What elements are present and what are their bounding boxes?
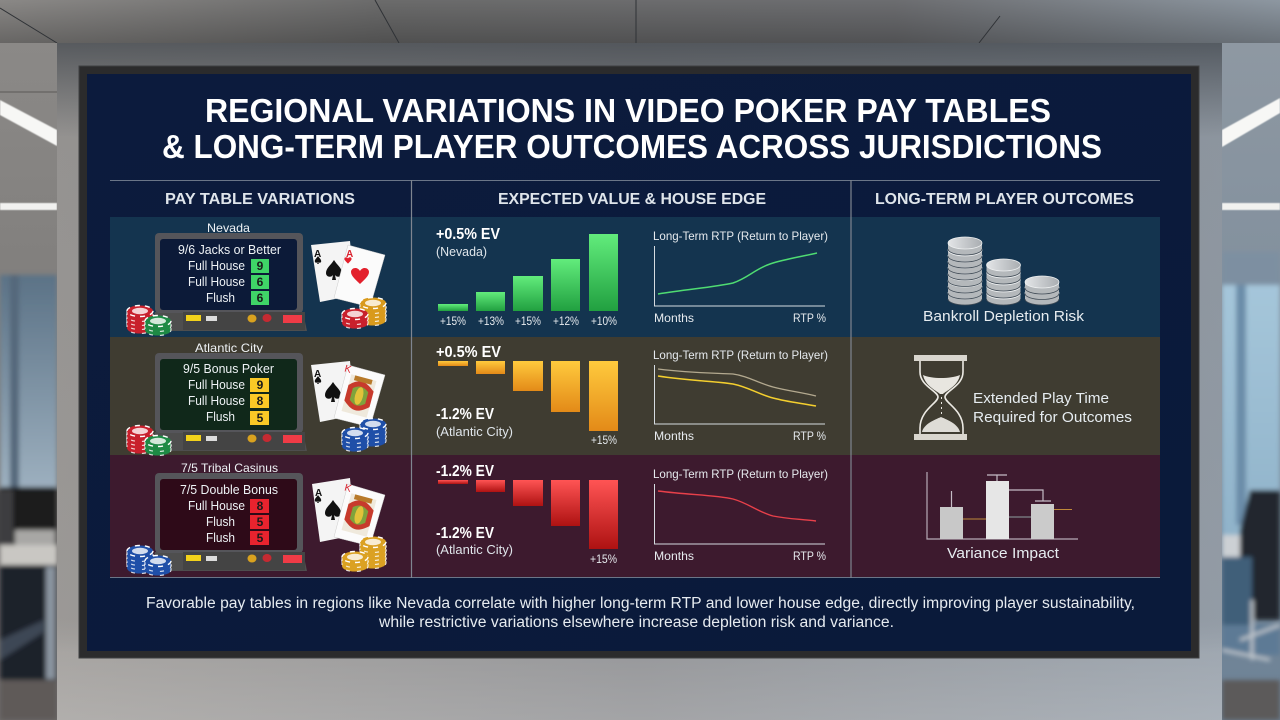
panel: bankroll depletion risk bbox=[923, 237, 1085, 325]
EV label: bottom: -1.2% EV bbox=[436, 406, 495, 423]
icon: video poker machine: Full House bbox=[188, 499, 245, 513]
column heading: expected value and house edge: EXPECTED VALUE & HOUSE EDGE bbox=[498, 191, 766, 208]
icon: video poker machine: 7/5 Double Bonus bbox=[180, 483, 278, 497]
title bbox=[162, 92, 1102, 165]
line chart: Nevada long-term RTP: Long-Term RTP (Return to Player) bbox=[653, 229, 828, 243]
line chart: Atlantic City long-term RTP: Long-Term RTP (Return to Player) bbox=[653, 348, 828, 362]
icon: video poker machine bbox=[150, 353, 307, 451]
bar chart: Nevada EV: +15% bbox=[515, 314, 541, 328]
icon: poker chips left bbox=[127, 306, 171, 336]
title: & LONG-TERM PLAYER OUTCOMES ACROSS JURISDICTIONS bbox=[162, 128, 1102, 165]
panel: Nevada expected value bbox=[436, 226, 828, 328]
title: REGIONAL VARIATIONS IN VIDEO POKER PAY TABLES bbox=[205, 92, 1051, 129]
bar chart: Tribal Casinos EV bbox=[438, 480, 618, 566]
panel: Tribal Casinos expected value bbox=[436, 463, 828, 566]
right ceiling lights bbox=[1222, 98, 1280, 210]
icon: video poker machine: 5 bbox=[257, 515, 264, 529]
line chart: Tribal Casinos long-term RTP: Long-Term RTP (Return to Player) bbox=[653, 467, 828, 481]
icon: poker chips left bbox=[127, 546, 171, 576]
icon: ace and king cards bbox=[311, 361, 385, 427]
bar chart: Nevada EV bbox=[438, 234, 618, 328]
icon: video poker machine: 8 bbox=[257, 499, 264, 513]
row band: Nevada bbox=[110, 217, 1160, 337]
bar chart: Nevada EV: +10% bbox=[591, 314, 617, 328]
icon: video poker machine: Flush bbox=[206, 515, 235, 529]
icon: ace and king cards bbox=[312, 478, 385, 546]
icon: video poker machine: Full House bbox=[188, 259, 245, 273]
line chart: Tribal Casinos long-term RTP bbox=[653, 467, 828, 563]
bar chart: Atlantic City EV: +15% bbox=[591, 433, 617, 447]
icon: ace and king cards: A bbox=[315, 488, 322, 499]
label: Bankroll Depletion Risk bbox=[923, 308, 1085, 325]
icon: video poker machine bbox=[150, 473, 307, 571]
panel: Atlantic City expected value bbox=[436, 344, 828, 447]
EV label: bottom bbox=[436, 525, 513, 557]
line chart: Tribal Casinos long-term RTP: Months bbox=[654, 549, 694, 563]
label: Atlantic City: Atlantic City bbox=[195, 341, 263, 355]
icon: video poker machine: Flush bbox=[206, 291, 235, 305]
column heading: long-term player outcomes: LONG-TERM PLAYER OUTCOMES bbox=[875, 191, 1134, 208]
label: Extended Play Time bbox=[973, 390, 1109, 407]
line chart: Nevada long-term RTP: Months bbox=[654, 311, 694, 325]
icon: ace and king cards: A bbox=[314, 369, 321, 380]
bar chart: Nevada EV: +12% bbox=[553, 314, 579, 328]
icon: poker chips right bbox=[342, 536, 386, 572]
icon: video poker machine: Flush bbox=[206, 410, 235, 424]
icon: hourglass bbox=[914, 355, 967, 440]
panel: Nevada pay table bbox=[127, 221, 386, 336]
icon: poker chips left bbox=[127, 426, 171, 456]
icon: video poker machine: 6 bbox=[257, 291, 264, 305]
icon: poker chips right bbox=[342, 418, 386, 452]
label bbox=[973, 390, 1132, 426]
left ceiling lights bbox=[0, 100, 57, 210]
icon: ace cards bbox=[311, 241, 385, 307]
EV label: bottom: (Atlantic City) bbox=[436, 424, 513, 439]
icon: video poker machine: 5 bbox=[257, 411, 264, 425]
EV label: top: +0.5% EV bbox=[436, 344, 502, 361]
left side view bbox=[0, 43, 57, 720]
line chart: Atlantic City long-term RTP bbox=[653, 348, 828, 443]
row band: Atlantic City bbox=[110, 337, 1160, 455]
EV label: bottom: (Atlantic City) bbox=[436, 542, 513, 557]
EV label: bottom: -1.2% EV bbox=[436, 525, 495, 542]
footer summary bbox=[146, 595, 1135, 631]
bar chart: Atlantic City EV bbox=[438, 361, 618, 447]
footer summary: while restrictive variations elsewhere increase depletion risk and variance. bbox=[378, 614, 894, 631]
row band: Tribal Casinos bbox=[110, 455, 1160, 577]
right side view bbox=[1222, 43, 1280, 720]
label: Tribal Casinos: 7/5 Tribal Casinus bbox=[181, 461, 278, 475]
line chart: Nevada long-term RTP bbox=[653, 229, 828, 325]
footer summary: Favorable pay tables in regions like Nevada correlate with higher long-term RTP and lower house edge, directly improving player sustainability, bbox=[146, 595, 1135, 612]
EV label bbox=[436, 226, 501, 259]
line chart: Nevada long-term RTP: RTP % bbox=[793, 311, 826, 325]
panel: variance impact bbox=[927, 472, 1078, 562]
line chart: Atlantic City long-term RTP: Months bbox=[654, 429, 694, 443]
icon: video poker machine: Full House bbox=[188, 378, 245, 392]
bar chart: Nevada EV: +13% bbox=[478, 314, 504, 328]
line chart: Tribal Casinos long-term RTP: RTP % bbox=[793, 549, 826, 563]
label: Nevada: Nevada bbox=[207, 221, 250, 235]
EV label: top: -1.2% EV bbox=[436, 463, 495, 480]
icon: ace cards: A bbox=[346, 249, 353, 260]
column heading: pay table variations: PAY TABLE VARIATIONS bbox=[165, 191, 355, 208]
icon: video poker machine bbox=[150, 233, 307, 331]
display screen bbox=[87, 74, 1191, 651]
icon: variance bar chart bbox=[927, 472, 1078, 539]
icon: video poker machine: 6 bbox=[257, 275, 264, 289]
icon: video poker machine: 8 bbox=[257, 394, 264, 408]
EV label: (Nevada) bbox=[436, 244, 487, 259]
icon: video poker machine: 9 bbox=[257, 378, 264, 392]
panel: extended play time bbox=[914, 355, 1132, 440]
bar chart: Tribal Casinos EV: +15% bbox=[590, 552, 617, 566]
line chart: Atlantic City long-term RTP: RTP % bbox=[793, 429, 826, 443]
label: Required for Outcomes bbox=[973, 409, 1132, 426]
bar chart: Nevada EV: +15% bbox=[440, 314, 466, 328]
EV label: +0.5% EV bbox=[436, 226, 501, 243]
icon: video poker machine: Full House bbox=[188, 275, 245, 289]
panel: Atlantic City pay table bbox=[127, 341, 386, 456]
icon: video poker machine: 9/5 Bonus Poker bbox=[183, 362, 274, 376]
icon: video poker machine: 9/6 Jacks or Better bbox=[178, 243, 281, 257]
display frame bbox=[79, 66, 1199, 658]
icon: video poker machine: Full House bbox=[188, 394, 245, 408]
icon: video poker machine: 5 bbox=[257, 531, 264, 545]
icon: coin stacks bbox=[948, 237, 1059, 305]
icon: video poker machine: Flush bbox=[206, 531, 235, 545]
panel: Tribal Casinos pay table bbox=[127, 461, 386, 576]
icon: poker chips right bbox=[342, 298, 386, 328]
EV label: bottom bbox=[436, 406, 513, 439]
label: Variance Impact bbox=[947, 545, 1060, 562]
icon: ace cards: A bbox=[314, 249, 321, 260]
icon: video poker machine: 9 bbox=[257, 259, 264, 273]
